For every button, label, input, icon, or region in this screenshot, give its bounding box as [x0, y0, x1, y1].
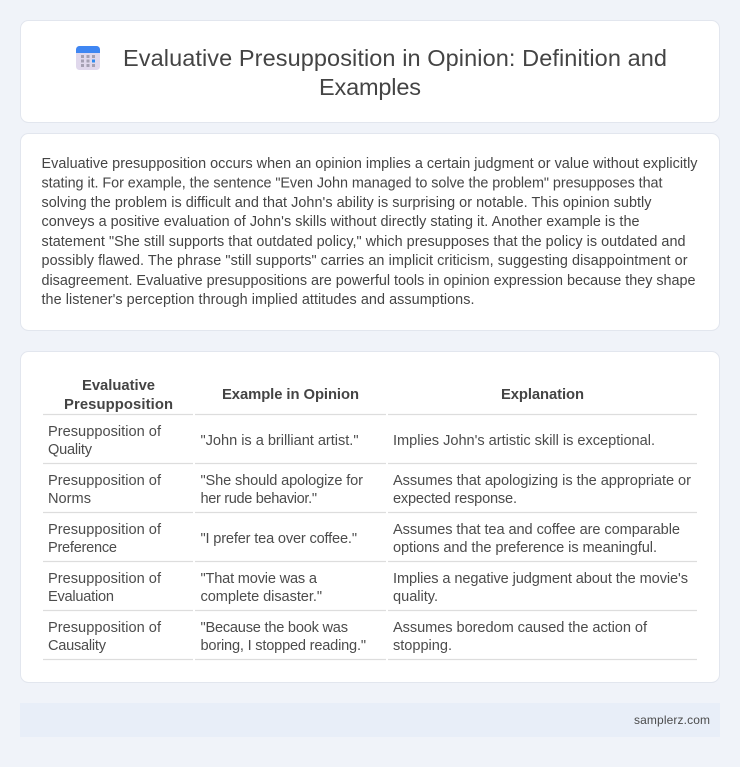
text block: definition: statement "She still supports that outdated policy," which presupposes that the policy is outdated and	[42, 234, 686, 250]
table row: causality: boring, I stopped reading."	[200, 638, 366, 654]
table row: causality: Assumes boredom caused the action of	[393, 620, 648, 636]
title	[123, 45, 667, 100]
table row: evaluation: quality.	[393, 589, 438, 605]
table row: evaluation: Presupposition of	[48, 571, 162, 587]
table row: norms: her rude behavior."	[200, 491, 317, 507]
table row: quality	[43, 424, 697, 464]
table row: quality: Implies John's artistic skill is exceptional.	[393, 433, 655, 449]
table row: causality	[43, 620, 697, 660]
table row: preference: Preference	[48, 540, 117, 556]
table row: evaluation: Evaluation	[48, 589, 114, 605]
text block: definition: solving the problem is difficult and that John's ability is surprising or notable. This opinion subtly	[42, 195, 652, 211]
text block: definition: Evaluative presupposition occurs when an opinion implies a certain judgment or value without explicitly	[42, 156, 698, 172]
panel: intro paragraph	[20, 134, 720, 330]
panel: title header	[20, 20, 720, 122]
table row: quality: "John is a brilliant artist."	[200, 433, 358, 449]
title: Examples	[319, 74, 421, 100]
table row: norms: expected response.	[393, 491, 517, 507]
text block: definition	[42, 156, 698, 308]
table row: preference	[43, 522, 697, 562]
footer	[20, 703, 720, 737]
table row: preference: Assumes that tea and coffee are comparable	[393, 522, 680, 538]
table row: norms: Presupposition of	[48, 473, 162, 489]
panel: table	[20, 352, 720, 682]
table row: preference: "I prefer tea over coffee."	[200, 531, 357, 547]
text block: definition: possibly flawed. The phrase "still supports" carries an implicit criticism, suggesting disappointment or	[42, 253, 688, 269]
icon: calendar	[76, 46, 100, 70]
table row: evaluation	[43, 571, 697, 610]
table row: causality: Presupposition of	[48, 620, 162, 636]
text block: definition: the listener's perception through implied attitudes and assumptions.	[42, 292, 474, 308]
table row: evaluation: complete disaster."	[200, 589, 322, 605]
table row: norms: Assumes that apologizing is the appropriate or	[393, 473, 691, 489]
table row: causality: Causality	[48, 638, 107, 654]
table header: Presupposition	[64, 397, 173, 413]
table header: Explanation	[501, 387, 584, 403]
table row: preference: Presupposition of	[48, 522, 162, 538]
table row: quality: Presupposition of	[48, 424, 162, 440]
text block: definition: stating it. For example, the sentence "Even John managed to solve the problem" presupposes that	[42, 176, 662, 192]
table header: Evaluative	[82, 378, 155, 394]
table row: norms: Norms	[48, 491, 91, 507]
table row: evaluation: "That movie was a	[200, 571, 318, 587]
table row: causality: stopping.	[393, 638, 452, 654]
footer: samplerz.com	[634, 713, 710, 727]
table row: quality: Quality	[48, 442, 93, 458]
table row: norms	[43, 473, 697, 512]
text block: definition: disagreement. Evaluative presuppositions are powerful tools in opinion expression because they shape	[42, 273, 696, 289]
text block: definition: conveys a positive evaluation of John's skills without directly stating it. Another example is the	[42, 214, 640, 230]
table row: causality: "Because the book was	[200, 620, 348, 636]
table row: evaluation: Implies a negative judgment about the movie's	[393, 571, 688, 587]
table header	[43, 378, 697, 414]
table header: Example in Opinion	[222, 387, 359, 403]
table row: norms: "She should apologize for	[200, 473, 363, 489]
title: Evaluative Presupposition in Opinion: Definition and	[123, 45, 667, 71]
table row: preference: options and the preference is meaningful.	[393, 540, 657, 556]
